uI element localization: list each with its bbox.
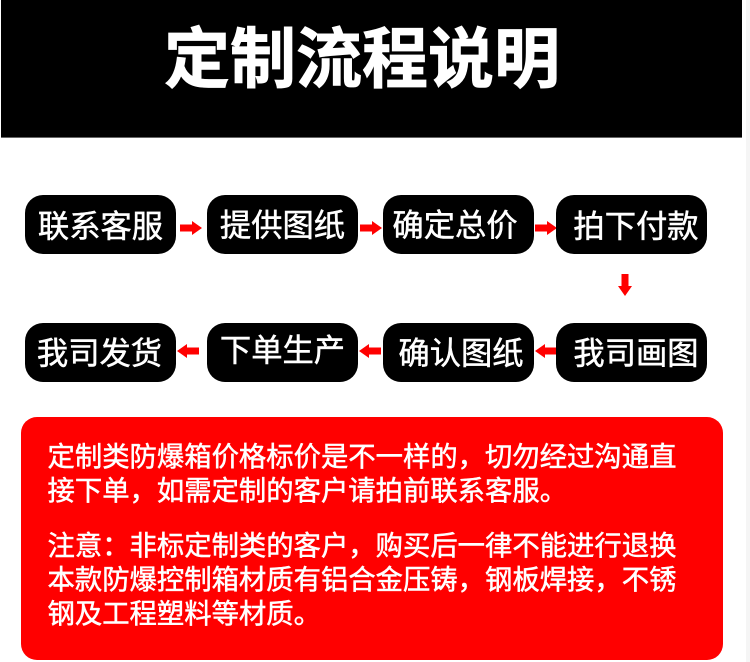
panel: notice	[21, 417, 723, 660]
arrow: down	[618, 274, 632, 296]
notice text: line 3: 注意：非标定制类的客户，购买后一律不能进行退换	[48, 530, 676, 561]
step: 拍下付款: 拍下付款	[573, 209, 699, 244]
step: 联系客服	[25, 195, 176, 254]
step: 我司发货	[25, 323, 176, 382]
step: 确认图纸: 确认图纸	[398, 336, 524, 371]
arrow: left 1	[535, 344, 556, 358]
step: 确认图纸	[383, 323, 534, 382]
header banner	[1, 0, 742, 138]
notice text: line 2: 接下单，如需定制的客户请拍前联系客服。	[48, 475, 567, 506]
step: 我司画图: 我司画图	[573, 336, 699, 371]
step: 拍下付款	[556, 195, 707, 254]
step: 联系客服: 联系客服	[38, 209, 163, 244]
arrow: left 3	[177, 344, 199, 358]
arrow: left 2	[359, 344, 381, 358]
step: 确定总价	[383, 195, 534, 254]
notice text: line 4: 本款防爆控制箱材质有铝合金压铸，钢板焊接，不锈	[48, 564, 676, 595]
step: 下单生产: 下单生产	[220, 333, 345, 368]
step: 我司画图	[556, 323, 707, 382]
step: 确定总价: 确定总价	[392, 208, 518, 243]
step: 我司发货: 我司发货	[37, 336, 162, 371]
step: 提供图纸: 提供图纸	[220, 208, 345, 243]
step: 提供图纸	[207, 195, 358, 254]
arrow: right 3	[535, 221, 556, 235]
notice text: line 5: 钢及工程塑料等材质。	[48, 598, 321, 629]
right edge strip	[746, 0, 750, 662]
arrow: right 1	[180, 221, 202, 235]
notice text: line 1: 定制类防爆箱价格标价是不一样的，切勿经过沟通直	[48, 441, 676, 472]
title: 定制流程说明	[164, 22, 560, 96]
arrow: right 2	[360, 221, 382, 235]
step: 下单生产	[207, 323, 358, 382]
